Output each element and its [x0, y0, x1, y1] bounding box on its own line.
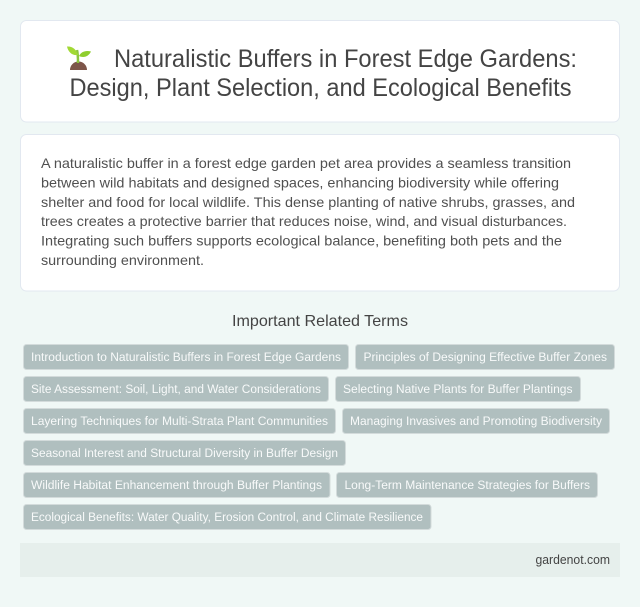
tag: long-term maintenance	[336, 472, 598, 498]
tag: managing invasives	[342, 408, 610, 434]
tag: site assessment: Site Assessment: Soil, Light, and Water Considerations	[31, 382, 321, 396]
tag: wildlife habitat: Wildlife Habitat Enhancement through Buffer Plantings	[31, 478, 322, 492]
heading: important related terms: Important Related Terms	[232, 313, 408, 330]
title: Naturalistic Buffers in Forest Edge Gardens:	[114, 45, 577, 73]
tag: introduction	[24, 344, 348, 370]
paragraph text: surrounding environment.	[41, 252, 204, 268]
tag: principles: Principles of Designing Effective Buffer Zones	[364, 350, 607, 364]
tag: principles	[356, 344, 614, 370]
tag: long-term maintenance: Long-Term Maintenance Strategies for Buffers	[344, 478, 590, 492]
tag: layering techniques	[24, 408, 336, 434]
title	[70, 45, 577, 102]
footer bar	[20, 543, 620, 577]
paragraph text: shelter and food for local wildlife. This dense planting of native shrubs, grasses, and	[41, 194, 575, 210]
header panel	[20, 20, 620, 122]
tag: ecological benefits: Ecological Benefits: Water Quality, Erosion Control, and Climate Resilience	[31, 510, 423, 524]
title: Design, Plant Selection, and Ecological Benefits	[70, 74, 572, 102]
paragraph text: trees creates a protective barrier that reduces noise, wind, and visual disturbances.	[41, 213, 567, 229]
icon: seedling	[67, 46, 91, 70]
tag: ecological benefits	[24, 504, 431, 530]
panel: summary paragraph	[20, 134, 620, 291]
tag: wildlife habitat	[24, 472, 330, 498]
tag: seasonal interest	[24, 440, 346, 466]
tag: selecting native plants: Selecting Native Plants for Buffer Plantings	[343, 382, 572, 396]
tag: introduction: Introduction to Naturalistic Buffers in Forest Edge Gardens	[31, 350, 341, 364]
tag: selecting native plants	[336, 376, 580, 402]
tag: site assessment	[24, 376, 328, 402]
footer source text: gardenot.com	[536, 552, 610, 567]
paragraph text: A naturalistic buffer in a forest edge garden pet area provides a seamless transition	[41, 155, 571, 171]
tag: managing invasives: Managing Invasives and Promoting Biodiversity	[350, 414, 603, 428]
paragraph text: Integrating such buffers supports ecological balance, benefiting both pets and the	[41, 232, 562, 248]
related term tags	[24, 344, 614, 530]
tag: seasonal interest: Seasonal Interest and Structural Diversity in Buffer Design	[31, 446, 338, 460]
paragraph text	[41, 155, 575, 268]
paragraph text: between wild habitats and designed spaces, enhancing biodiversity while offering	[41, 174, 559, 190]
tag: layering techniques: Layering Techniques for Multi-Strata Plant Communities	[31, 414, 328, 428]
